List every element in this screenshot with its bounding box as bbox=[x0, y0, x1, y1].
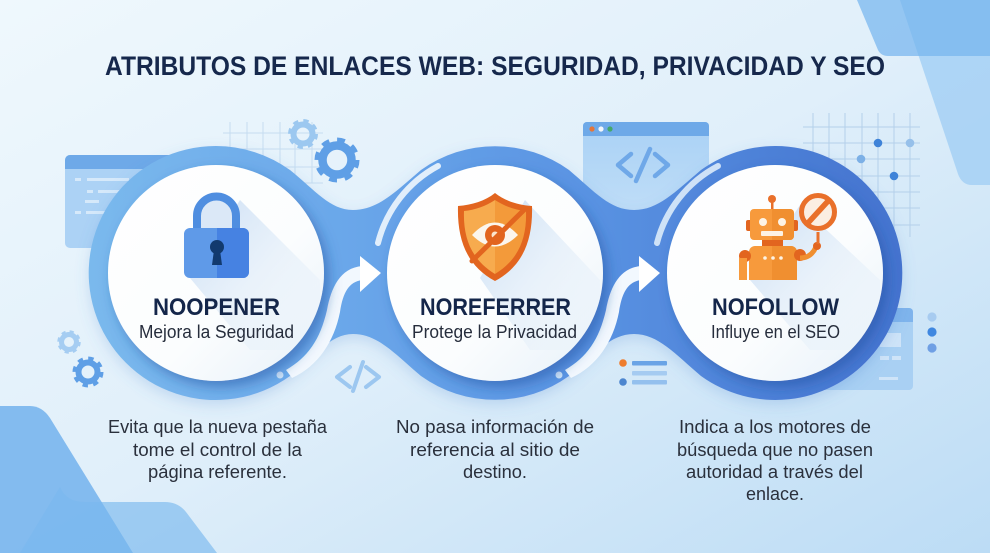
label noreferrer: NOREFERRER bbox=[420, 294, 571, 321]
decoration: small gears lower left bbox=[59, 332, 102, 386]
title: ATRIBUTOS DE ENLACES WEB: SEGURIDAD, PRIVACIDAD Y SEO bbox=[105, 51, 885, 81]
highlight arc circle 2 bbox=[378, 166, 438, 243]
decoration: grid with dots bbox=[803, 113, 920, 237]
icon: dark gear bbox=[317, 140, 357, 180]
long shadow shield bbox=[480, 200, 590, 346]
icon: lock bbox=[184, 196, 249, 278]
connected rings band bbox=[89, 146, 902, 400]
sublabel nofollow: Influye en el SEO bbox=[711, 322, 840, 342]
sublabel noreferrer: Protege la Privacidad bbox=[412, 322, 577, 342]
arrow 1 bbox=[276, 256, 381, 378]
white circle 1 bbox=[108, 165, 324, 381]
sublabel noopener: Mejora la Seguridad bbox=[139, 322, 294, 342]
arrow 2 bbox=[556, 256, 660, 378]
decoration: three vertical dots bbox=[927, 312, 937, 353]
label nofollow: NOFOLLOW bbox=[712, 294, 839, 321]
highlight arcs and arrows bbox=[276, 166, 718, 378]
decoration: lower right window bbox=[820, 308, 913, 390]
text block: nofollow description: enlace. bbox=[746, 483, 804, 504]
long shadow robot bbox=[750, 205, 870, 342]
text block: nofollow description bbox=[677, 416, 873, 504]
text block: noreferrer description: No pasa información de bbox=[396, 416, 594, 437]
highlight arc circle 3 bbox=[657, 166, 718, 243]
text block: nofollow description: autoridad a través del bbox=[686, 461, 863, 482]
white circle 3 bbox=[667, 165, 883, 381]
text block: noopener description: Evita que la nueva pestaña bbox=[108, 416, 328, 437]
text block: noreferrer description bbox=[396, 416, 594, 482]
icon: shield with crossed eye bbox=[458, 193, 532, 281]
text block: noopener description: página referente. bbox=[148, 461, 287, 482]
decoration: left code window bbox=[65, 155, 175, 248]
text block: nofollow description: Indica a los motores de bbox=[679, 416, 871, 437]
decoration: grid with gears bbox=[223, 121, 357, 183]
text block: noreferrer description: destino. bbox=[463, 461, 527, 482]
panel: noreferrer bbox=[387, 165, 603, 381]
panel: nofollow bbox=[667, 165, 883, 381]
white circle 2 bbox=[387, 165, 603, 381]
top right corner shapes bbox=[857, 0, 990, 185]
decoration: browser window with code bbox=[583, 122, 709, 232]
text block: noopener description: tome el control de la bbox=[133, 439, 303, 460]
label noopener: NOOPENER bbox=[153, 294, 280, 321]
icon: code symbol lower bbox=[337, 362, 379, 391]
panel: noopener bbox=[108, 165, 324, 381]
text block: nofollow description: búsqueda que no pasen bbox=[677, 439, 873, 460]
long shadow lock bbox=[190, 200, 308, 342]
bottom left corner shapes bbox=[0, 406, 217, 553]
text block: noreferrer description: referencia al sitio de bbox=[410, 439, 580, 460]
icon: robot with stop sign bbox=[739, 195, 834, 280]
decoration: list icon bbox=[619, 359, 667, 386]
icon: light gear bbox=[290, 121, 316, 147]
text block: noopener description bbox=[108, 416, 328, 482]
